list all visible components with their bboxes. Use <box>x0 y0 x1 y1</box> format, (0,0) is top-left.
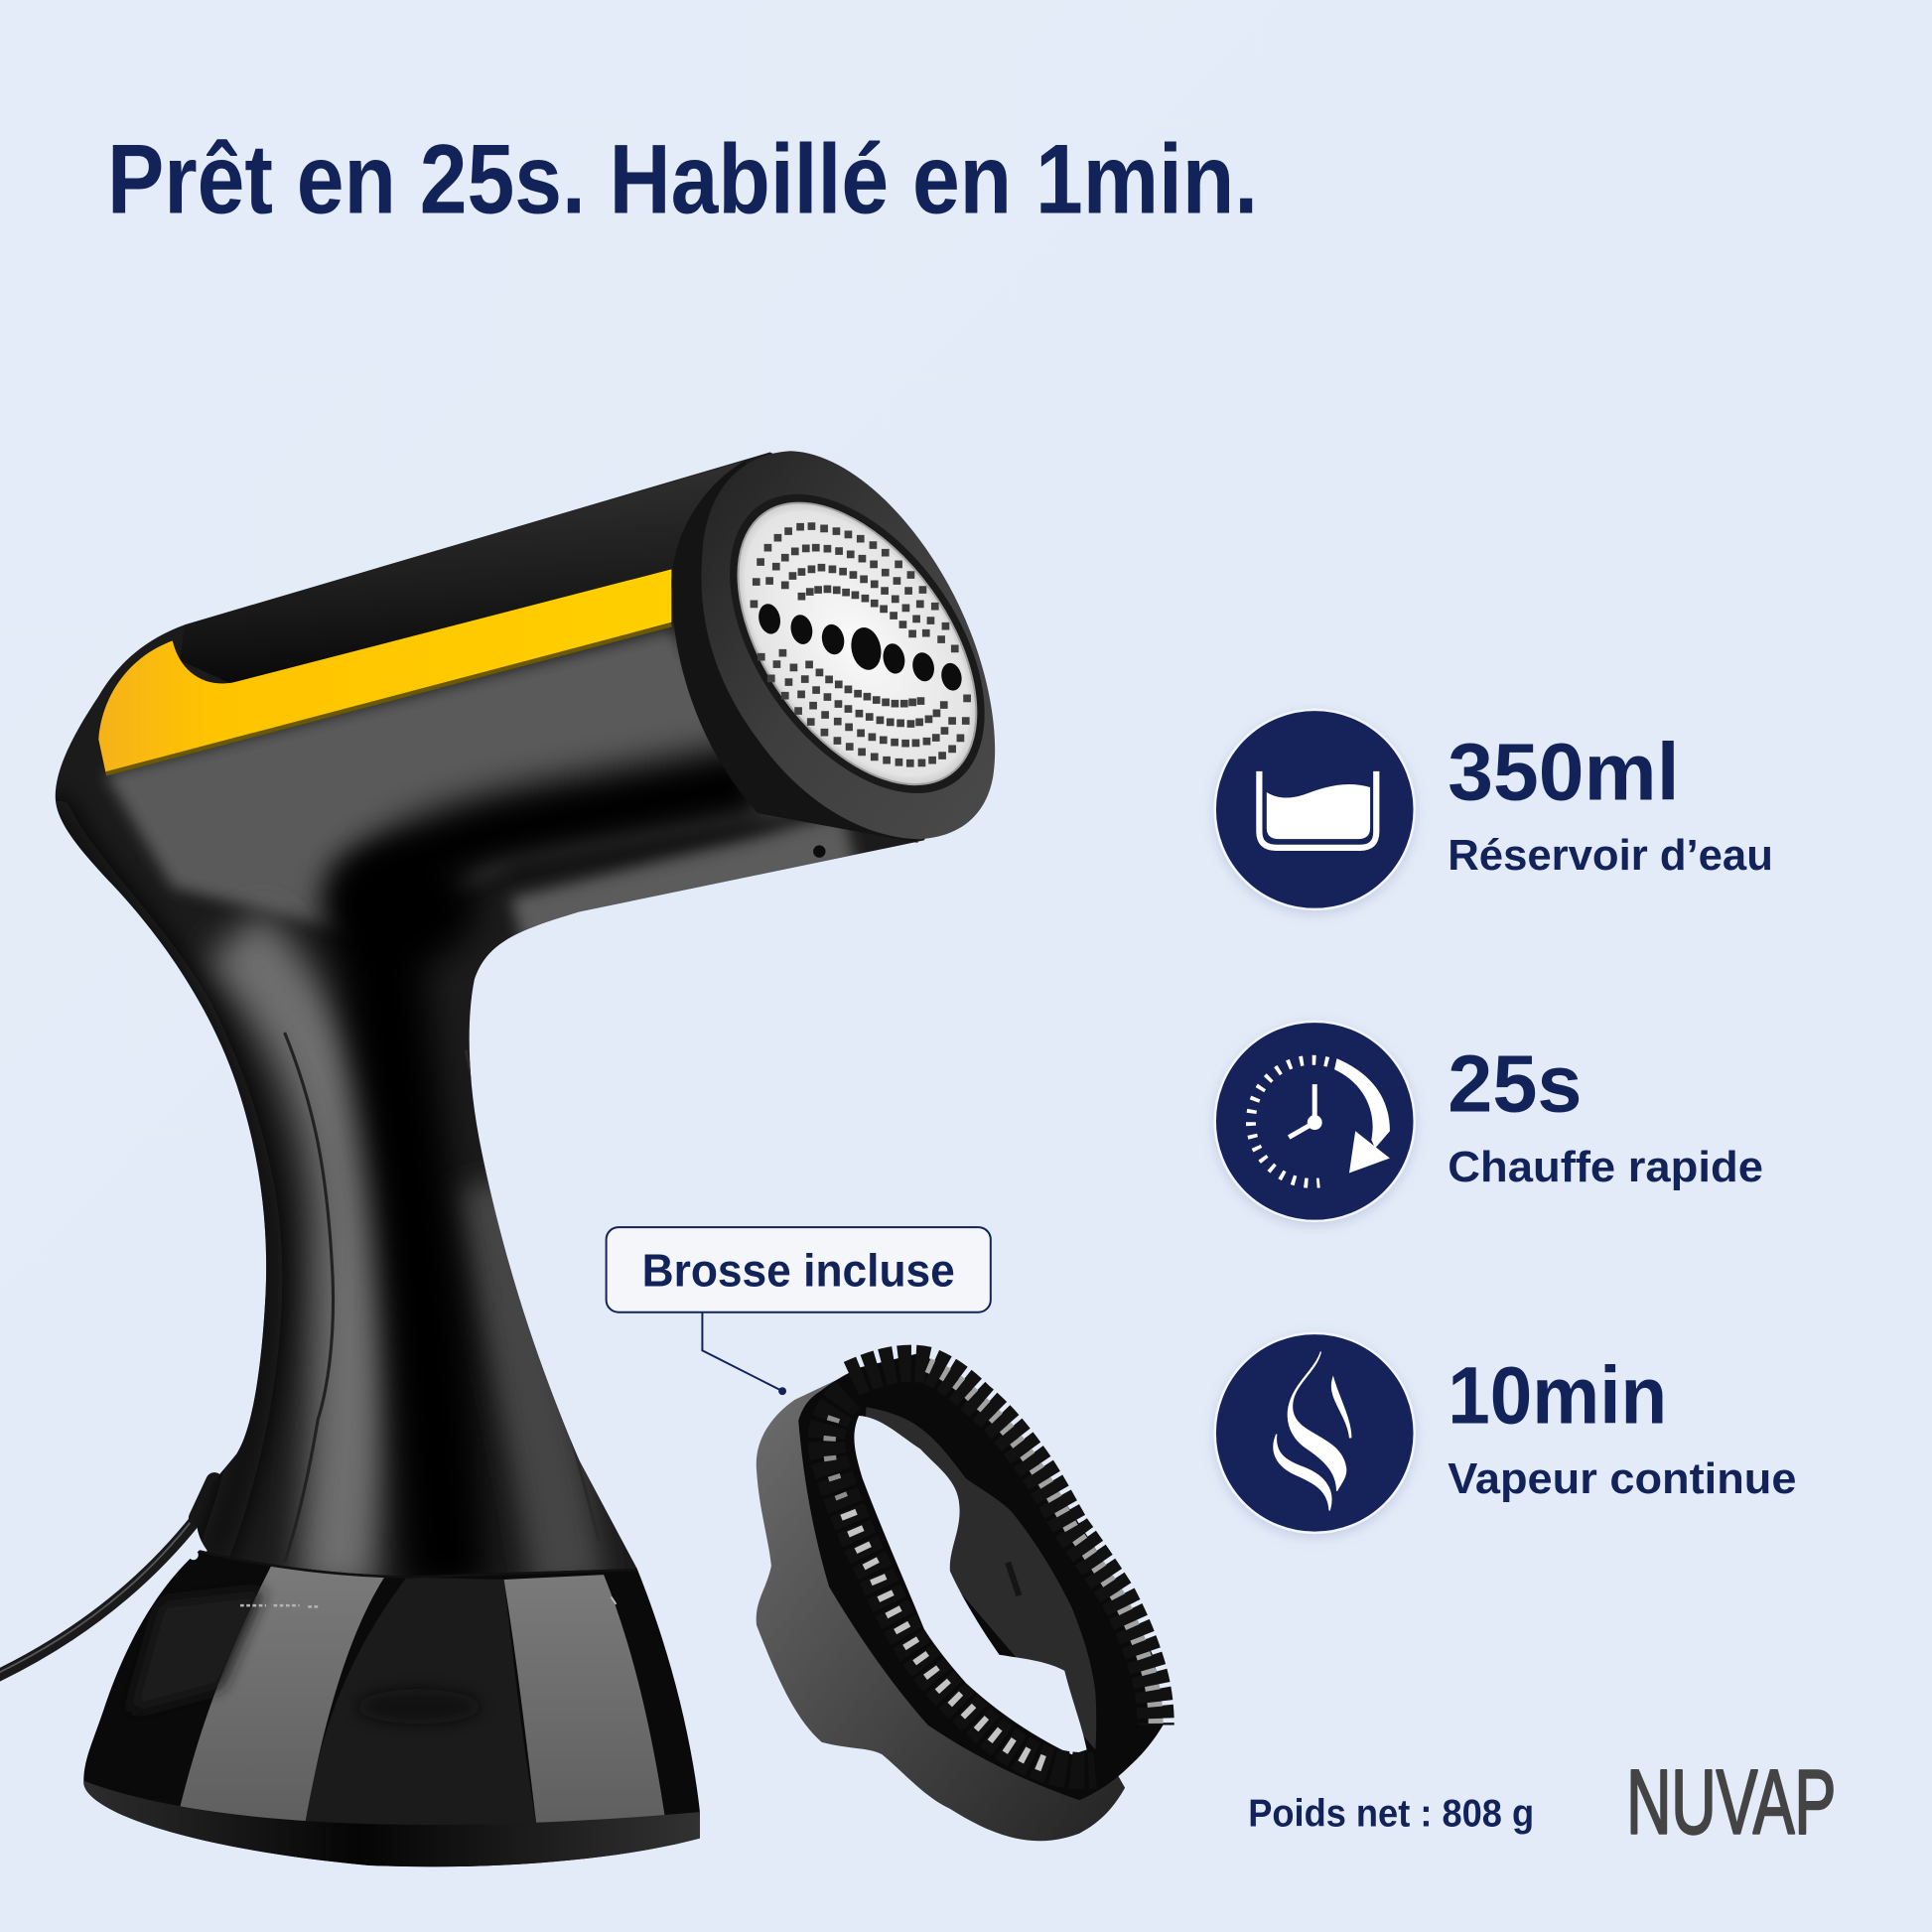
callout box <box>607 1227 991 1312</box>
large holes <box>756 602 964 692</box>
cable notch <box>189 1550 199 1560</box>
caption: Chauffe rapide <box>1448 1144 1763 1191</box>
small holes <box>754 526 967 763</box>
value: 350ml <box>1448 727 1680 817</box>
head face <box>701 451 995 839</box>
brush opening <box>854 1416 1087 1754</box>
leader dot <box>778 1387 786 1395</box>
brush ring <box>798 1353 1164 1800</box>
icon: steam <box>1215 1333 1415 1533</box>
head detail screw <box>813 845 826 858</box>
brush slot <box>1008 1563 1019 1595</box>
product: garment steamer <box>0 419 1036 1885</box>
callout: brosse incluse <box>607 1227 991 1395</box>
base <box>83 1550 700 1866</box>
bristle highlights inner <box>848 1512 1053 1767</box>
bristle highlights outer <box>928 1365 1156 1725</box>
leader line <box>702 1312 782 1391</box>
caption: Vapeur continue <box>1448 1455 1796 1503</box>
power cable <box>0 1481 214 1677</box>
yellow band <box>98 569 671 773</box>
callout label: Brosse incluse <box>642 1245 955 1297</box>
icon: clock with arrow <box>1215 1022 1415 1221</box>
brush plate <box>863 1407 1096 1749</box>
head collar <box>671 461 918 843</box>
feature: steam <box>1215 1333 1796 1533</box>
value: 10min <box>1448 1350 1667 1441</box>
brush attachment <box>757 1353 1164 1841</box>
steamer body <box>56 453 925 1577</box>
net weight: Poids net : 808 g <box>1248 1792 1534 1835</box>
bristle highlights upper <box>829 1417 845 1506</box>
outer bristles <box>852 1363 1156 1725</box>
logo: NUVAP: NUVAP <box>1626 1752 1836 1854</box>
steam plate <box>678 448 1036 839</box>
caption: Réservoir d’eau <box>1448 832 1773 880</box>
title: Prêt en 25s. Habillé en 1min. <box>107 125 1258 235</box>
inner bristles <box>826 1395 1095 1771</box>
feature: heating <box>1215 1022 1763 1221</box>
brush housing <box>757 1368 1125 1841</box>
feature: reservoir <box>1215 710 1773 909</box>
value: 25s <box>1448 1038 1583 1129</box>
icon: water tank <box>1215 710 1415 909</box>
